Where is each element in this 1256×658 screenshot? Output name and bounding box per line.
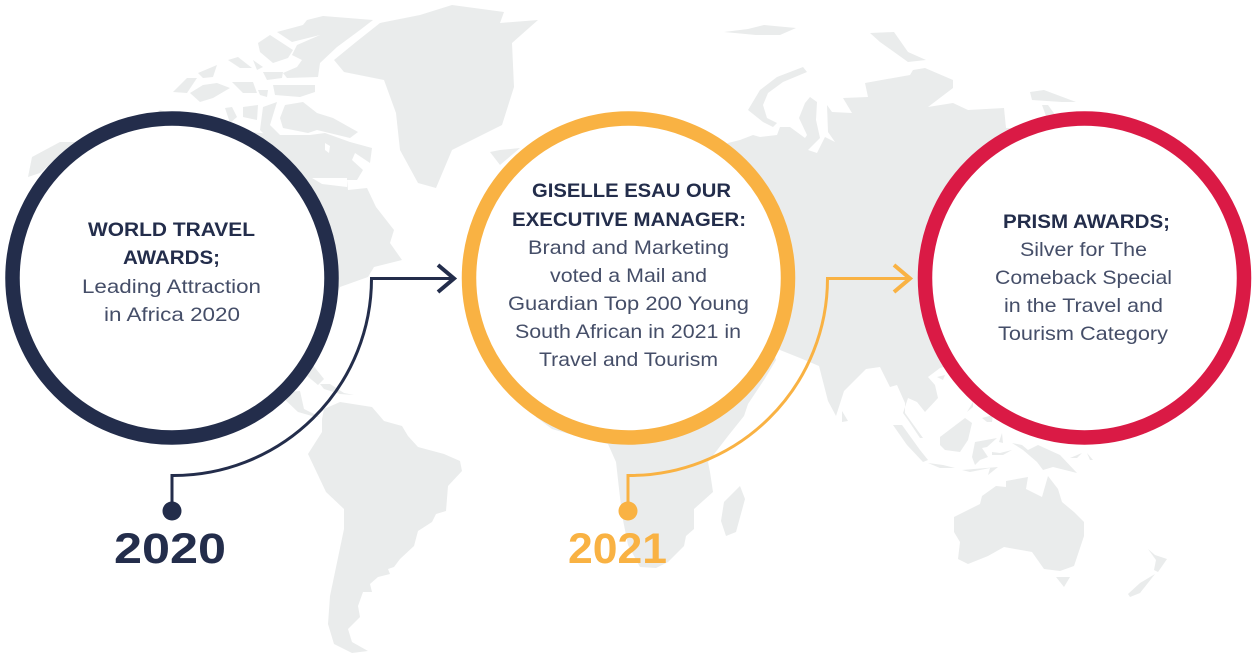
map: Arctic islet 1	[228, 57, 252, 68]
circle: yellow ring	[469, 118, 788, 438]
map: Baffin Island	[280, 102, 358, 138]
map: Mexico and Central America	[280, 360, 324, 417]
map: New Guinea	[1012, 443, 1077, 473]
map: New Britain	[1070, 453, 1082, 458]
map: North America mainland	[60, 110, 402, 360]
text: Giselle Esau: Guardian Top 200 Young	[508, 293, 749, 315]
map: Philippines south	[982, 415, 993, 422]
map: Lesser Sunda	[962, 467, 998, 475]
map: Borneo	[940, 418, 972, 452]
text: Giselle Esau: Travel and Tourism	[539, 349, 718, 371]
map: Australia	[954, 476, 1084, 571]
map: Arctic islet 4	[198, 65, 217, 78]
map: Victoria Island	[190, 83, 230, 102]
text: World Travel Awards: Leading Attraction	[82, 276, 261, 298]
map: Arctic islet 6	[258, 90, 268, 97]
map: Sulawesi	[972, 438, 997, 465]
text: Prism Awards: Silver for The	[1020, 239, 1147, 261]
map: Svalbard	[724, 25, 796, 35]
text: Giselle Esau: EXECUTIVE MANAGER:	[512, 209, 746, 231]
text: Prism Awards: Tourism Category	[998, 323, 1168, 345]
text: Giselle Esau: GISELLE ESAU OUR	[532, 180, 731, 202]
text: Giselle Esau: South African in 2021 in	[515, 321, 741, 343]
map: Severnaya Zemlya	[1030, 90, 1076, 102]
map: Banks Island	[173, 78, 197, 93]
circle: navy ring	[12, 118, 332, 438]
map: New Siberian islands	[1042, 105, 1056, 116]
text: World Travel Awards: WORLD TRAVEL	[88, 219, 255, 241]
map: New Zealand north	[1148, 549, 1167, 572]
text: Giselle Esau: voted a Mail and	[550, 265, 707, 287]
map: Sri Lanka	[842, 411, 848, 422]
connector: 2020 to 2021	[162, 265, 454, 520]
text: Prism Awards: in the Travel and	[1004, 295, 1163, 317]
text: World Travel Awards: in Africa 2020	[104, 304, 240, 326]
map: Sumatra	[893, 425, 928, 462]
text: Giselle Esau	[508, 180, 749, 371]
map: Caribbean islands	[320, 384, 354, 395]
map: New Zealand south	[1128, 574, 1155, 597]
map: Philippines north	[967, 402, 973, 412]
map: Moluccas	[992, 450, 1012, 455]
text: Giselle Esau: Brand and Marketing	[528, 237, 729, 259]
map: inland lake	[325, 143, 330, 153]
map: Hainan	[937, 375, 945, 380]
map: Axel Heiberg Island	[258, 35, 293, 63]
text: Prism Awards: PRISM AWARDS;	[1003, 211, 1170, 233]
map: Arctic islet 7	[225, 107, 237, 123]
map: Madagascar	[721, 486, 745, 536]
map: Arctic islet 5	[232, 82, 257, 93]
map: Alaska	[28, 142, 76, 177]
map: Ellesmere Island	[277, 16, 373, 78]
map: Arctic islet 8	[243, 105, 258, 120]
circle: red ring	[925, 118, 1244, 438]
year: 2020: 2020	[114, 525, 226, 573]
map: Arctic islet 9	[260, 102, 280, 147]
map: Halmahera	[999, 433, 1003, 443]
map: Africa	[520, 250, 776, 568]
map: Tasmania	[1056, 577, 1070, 587]
map: Java	[928, 463, 955, 468]
text: Prism Awards	[995, 211, 1172, 345]
map: New Ireland	[1087, 453, 1093, 460]
map: Scandinavia	[748, 67, 807, 127]
connector: 2021 to Prism	[618, 265, 910, 520]
map: South America	[308, 402, 462, 653]
text: World Travel Awards: AWARDS;	[123, 247, 220, 269]
year: 2021: 2021	[568, 525, 667, 573]
map: Novaya Zemlya	[870, 32, 926, 62]
map: Arctic islet 3	[263, 72, 283, 80]
map: Devon Island	[273, 85, 315, 97]
map: Arctic islet 2	[253, 60, 263, 70]
map: Eurasia	[680, 68, 1200, 438]
map: Greenland	[334, 5, 538, 188]
map: Hudson Bay strait	[312, 178, 347, 187]
map: Iceland	[490, 148, 520, 165]
text: World Travel Awards	[82, 219, 261, 326]
text: Prism Awards: Comeback Special	[995, 267, 1172, 289]
